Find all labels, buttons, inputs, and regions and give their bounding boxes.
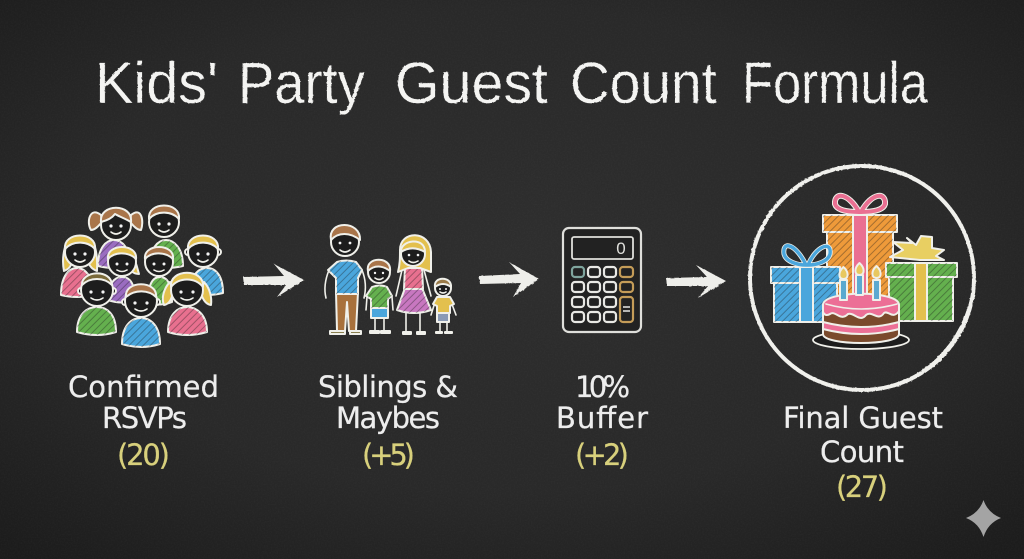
label: confirmed RSVPs: (20) <box>117 438 170 472</box>
icon: crowd of children <box>61 206 223 347</box>
child: brown green middle <box>145 247 173 304</box>
label: siblings and maybes: Maybes <box>336 401 440 435</box>
title: Count <box>570 51 717 116</box>
child: boy green back <box>149 206 183 268</box>
icon: calculator: 0 <box>616 239 626 258</box>
child: front blue <box>122 284 160 347</box>
man <box>325 225 365 334</box>
label: final guest count <box>783 401 943 504</box>
icon: family with siblings <box>325 225 456 334</box>
label: final guest count: (27) <box>836 470 888 504</box>
woman <box>396 235 431 334</box>
arrow 3 <box>666 265 726 298</box>
child: blond blue right <box>185 236 223 295</box>
title: Party <box>238 51 365 116</box>
label: final guest count: Final Guest <box>783 401 943 435</box>
candles <box>839 263 881 300</box>
calculator display <box>572 237 633 259</box>
label: 10% buffer: Buffer <box>556 401 648 435</box>
label: confirmed RSVPs <box>68 370 219 472</box>
child: front green <box>77 273 116 335</box>
label: siblings and maybes: (+5) <box>362 438 415 472</box>
label: 10% buffer: 10% <box>575 370 630 404</box>
child: pigtails purple <box>89 208 142 268</box>
label: siblings and maybes <box>318 370 458 472</box>
arrow 2 <box>479 262 539 297</box>
icon: calculator <box>563 228 641 332</box>
blue gift <box>771 246 840 322</box>
chalk circle <box>750 166 974 390</box>
label: confirmed RSVPs: Confirmed <box>68 370 219 404</box>
label: 10% buffer: (+2) <box>575 438 629 472</box>
label: confirmed RSVPs: RSVPs <box>102 401 187 435</box>
child: blonde pink left <box>61 236 97 297</box>
icon: gifts and cake in a circle <box>750 166 974 390</box>
calculator buttons <box>572 267 633 322</box>
child: blonde purple middle <box>108 247 139 302</box>
child: front pink <box>163 273 211 335</box>
little boy <box>431 279 456 333</box>
green gift <box>886 236 957 321</box>
older boy <box>366 260 393 333</box>
label: 10% buffer <box>556 370 648 472</box>
title <box>95 51 929 116</box>
icon: sparkle watermark <box>966 500 1001 537</box>
title: Kids' <box>95 51 218 116</box>
orange gift <box>823 196 897 300</box>
title: Formula <box>742 51 929 116</box>
label: siblings and maybes: Siblings & <box>318 370 458 404</box>
birthday cake <box>813 263 909 349</box>
arrow 1 <box>243 264 304 297</box>
label: final guest count: Count <box>820 435 904 469</box>
title: Guest <box>395 51 548 116</box>
